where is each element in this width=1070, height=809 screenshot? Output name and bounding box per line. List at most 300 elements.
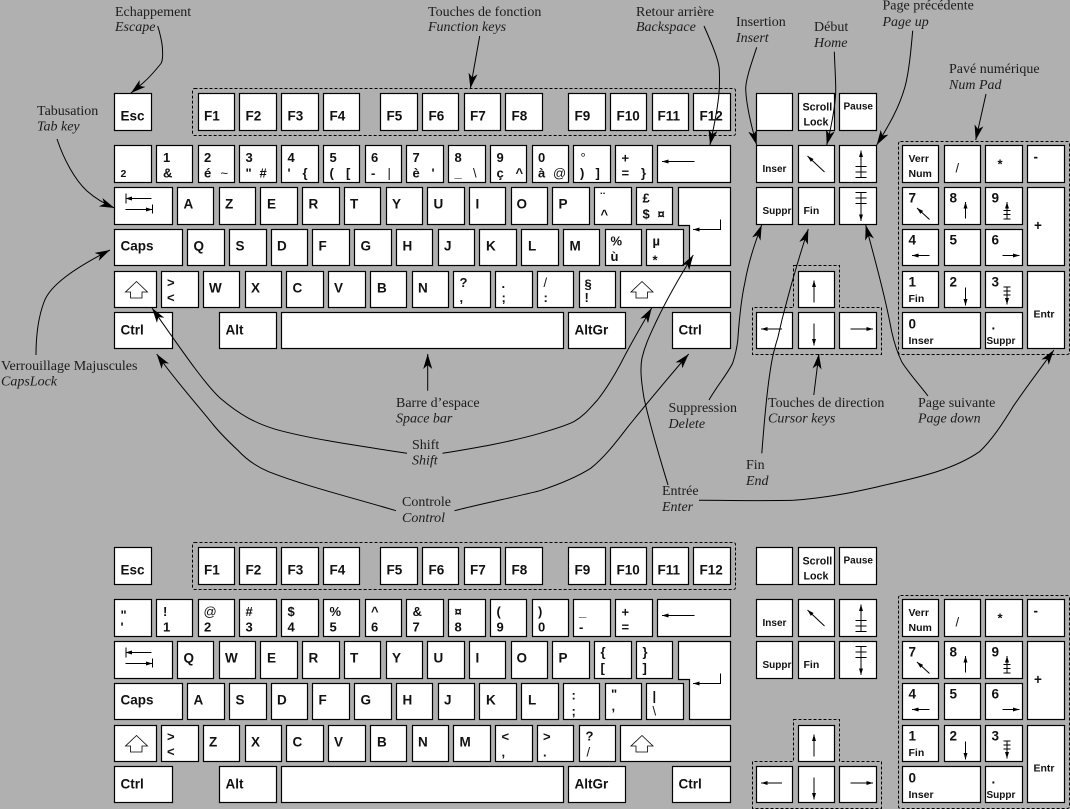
key: : ;: :: [572, 688, 576, 702]
key: F7: F7: [470, 562, 486, 578]
key: Y: Y: [392, 196, 401, 212]
key: . Suppr: [986, 312, 1022, 348]
key: Scroll Lock: [798, 548, 834, 584]
label: Page down: [917, 396, 995, 426]
key: S: S: [236, 692, 245, 708]
key: AltGr: AltGr: [574, 322, 609, 338]
key: F11: F11: [658, 562, 681, 578]
key: 6: 6: [992, 686, 1000, 702]
key: ) 0: 0: [538, 620, 545, 634]
block: numeric keypad: [902, 600, 1064, 802]
key: AltGr: [568, 766, 626, 802]
key: 5: [944, 684, 980, 720]
key: % 5: [324, 600, 360, 636]
key: F9: [568, 548, 606, 584]
key: P: [552, 642, 590, 678]
key: Backspace: [658, 600, 730, 636]
label: Num Pad: Pavé numérique: [949, 62, 1040, 77]
key: 1 &: 1: [163, 150, 170, 165]
key: " ': ": [120, 608, 127, 622]
key: J: [438, 684, 474, 720]
key: F8: [506, 94, 542, 130]
key: right Ctrl: [672, 312, 730, 348]
key: A: A: [184, 196, 194, 212]
key: $ 4: 4: [288, 620, 296, 634]
key: *: [986, 600, 1022, 636]
key: $ 4: [282, 600, 318, 636]
key: P: P: [558, 196, 568, 212]
arrow: Escape: [131, 26, 163, 93]
label: Page up: [882, 0, 974, 30]
key: W: [204, 272, 240, 308]
key: Scroll Lock: Scroll: [802, 556, 832, 568]
key: M: M: [460, 734, 471, 750]
label: CapsLock: [1, 359, 137, 390]
key: Q: [188, 230, 224, 266]
key: J: J: [444, 692, 452, 708]
key: *: *: [998, 156, 1004, 172]
key: 1 &: [156, 146, 192, 182]
key: < ,: [496, 726, 532, 762]
key: 0 Inser: Inser: [908, 789, 934, 801]
key: U: U: [434, 650, 443, 666]
key: -: [1028, 146, 1064, 182]
key: > <: <: [167, 290, 175, 305]
label: Control: [402, 495, 451, 526]
key: 2: 2: [950, 728, 957, 744]
key: Caps: [114, 230, 182, 266]
key: F7: [464, 548, 500, 584]
key: F10: [610, 548, 646, 584]
key: N: N: [418, 280, 428, 296]
key: 8: [944, 188, 980, 224]
key: 8 _ \: \: [473, 166, 477, 180]
key: Page up: [840, 146, 876, 182]
key: 5: [944, 230, 980, 266]
key: F12: F12: [700, 562, 723, 578]
key: > .: >: [543, 729, 551, 744]
key: H: H: [402, 692, 412, 708]
block: navigation keys: [756, 94, 876, 224]
key: left Ctrl: [114, 312, 172, 348]
key: ) 0: [532, 600, 568, 636]
key: ( 9: [490, 600, 526, 636]
key: E: [260, 642, 298, 678]
key: K: K: [486, 238, 496, 254]
key: ? /: [580, 726, 616, 762]
key: ) 0: ): [538, 604, 542, 619]
key: L: [522, 230, 558, 266]
key: H: [396, 230, 432, 266]
key: F3: [282, 548, 318, 584]
key: M: [564, 230, 600, 266]
key: F4: F4: [330, 562, 346, 578]
key: Alt: [220, 766, 276, 802]
arrow: Insert: [746, 47, 757, 145]
key: ! 1: 1: [163, 620, 170, 634]
key: Y: [386, 188, 422, 224]
key: 8 _ \: 8: [454, 150, 462, 165]
key: +: [1028, 188, 1064, 266]
row: QWERTY letters: [114, 642, 730, 720]
key: £ $ ¤: [636, 188, 672, 224]
key: 9 ç ^: 9: [496, 150, 504, 165]
key: 9 ç ^: ç: [496, 166, 504, 180]
key: ^ 6: [366, 600, 402, 636]
key: G: G: [360, 238, 371, 254]
key: 2 superscript: [114, 146, 152, 182]
key: ¨ ^: ^: [600, 207, 608, 222]
key: + =: [616, 600, 652, 636]
key: M: [454, 726, 490, 762]
key: 3: 3: [992, 274, 1000, 290]
key: 8 _ \: [448, 146, 486, 182]
block: navigation keys: [756, 548, 876, 678]
key: 4 ' {: ': [288, 166, 291, 180]
row: AZERTY letters: [114, 188, 730, 266]
key: } ]: [636, 642, 672, 678]
key: F10: F10: [616, 562, 640, 578]
key: F6: [422, 548, 458, 584]
key: F2: [240, 94, 276, 130]
label: Enter: [661, 484, 699, 515]
key: 1 Fin: Fin: [908, 747, 924, 759]
key: + =: =: [622, 620, 630, 634]
key: F: F: [318, 692, 327, 708]
key: µ *: *: [652, 252, 658, 268]
key: Fin: Fin: [804, 205, 819, 217]
key: 7 è ': ': [432, 166, 435, 180]
key: 5 ( [: 5: [330, 150, 337, 165]
key: 9: [986, 188, 1022, 224]
key: 9: [986, 642, 1022, 678]
key: . ;: .: [502, 276, 505, 291]
key: down arrow: [798, 312, 834, 348]
key: 3 " #: #: [260, 166, 268, 180]
dashed frame: cursor keys: [752, 266, 882, 354]
label: Insert: Insertion: [736, 15, 786, 30]
key: 1 &: &: [163, 166, 172, 180]
key: { [: [594, 642, 632, 678]
key: F12: F12: [700, 108, 723, 124]
key: M: M: [570, 238, 581, 254]
key: left Shift: [114, 726, 156, 762]
key: F6: F6: [428, 562, 445, 578]
key: & 7: [406, 600, 444, 636]
label: Tab key: Tabusation: [37, 104, 98, 119]
key: 1 Fin: 1: [908, 274, 916, 290]
key: > <: [162, 272, 198, 308]
key: blank: [756, 94, 792, 130]
key: 7 è ': 7: [412, 150, 420, 165]
callout labels: [1, 0, 1040, 526]
key: H: [396, 684, 432, 720]
key: +: +: [1034, 218, 1042, 233]
key: § !: !: [584, 290, 589, 305]
key: # 3: 3: [246, 620, 253, 634]
key: T: T: [350, 196, 359, 212]
key: ? ,: [454, 272, 490, 308]
label: Home: [813, 20, 848, 51]
key: ¤ 8: 8: [454, 620, 462, 634]
key: F2: F2: [246, 108, 261, 124]
key: Verr Num: Num: [908, 622, 932, 634]
key: £ $ ¤: $: [642, 206, 650, 222]
key: 2: [944, 726, 980, 762]
label: Page up: Page up: [882, 15, 929, 30]
key: } ]: }: [642, 644, 648, 660]
label: Home: Home: [813, 36, 847, 51]
key: F8: [506, 548, 542, 584]
key: R: R: [308, 196, 318, 212]
key: V: V: [334, 280, 343, 296]
arrow: Shift right: [442, 308, 652, 453]
key: F: [312, 684, 350, 720]
key: /: /: [956, 614, 960, 630]
key: Enter: [678, 188, 730, 266]
key: O: O: [516, 196, 527, 212]
key: 2: 2: [950, 274, 957, 290]
key: F6: F6: [428, 108, 445, 124]
key: Q: Q: [184, 650, 194, 666]
key: 4: 4: [908, 686, 916, 702]
key: F1: [198, 94, 234, 130]
label: Function keys: [427, 5, 541, 35]
key: Inser: Inser: [762, 618, 787, 629]
key: + = }: +: [622, 150, 630, 166]
key: Tab: [114, 642, 172, 678]
key: F9: F9: [574, 562, 590, 578]
key: left arrow: [756, 766, 792, 802]
key: F9: F9: [574, 108, 590, 124]
arrow: Page up: [877, 31, 913, 145]
key: F2: [240, 548, 276, 584]
key: . Suppr: [986, 766, 1022, 802]
key: /: [944, 146, 980, 182]
key: +: [1028, 642, 1064, 720]
key: 0 à @: 0: [538, 150, 545, 165]
label: Escape: Echappement: [115, 5, 191, 20]
key: I: I: [476, 196, 479, 212]
key: " ,: ": [611, 686, 617, 702]
key: 4: 4: [908, 232, 916, 248]
key: Verr Num: Verr: [908, 153, 929, 165]
key: F3: F3: [288, 562, 304, 578]
key: ¤ 8: ¤: [454, 604, 462, 619]
key: up arrow: [798, 272, 834, 308]
key: 4 ' {: [282, 146, 318, 182]
key: 3: [986, 726, 1022, 762]
key: F10: [610, 94, 646, 130]
key: X: [246, 726, 282, 762]
key: F: [312, 230, 350, 266]
key: > <: [162, 726, 198, 762]
key: Verr Num: Verr: [908, 607, 929, 619]
key: 8: 8: [950, 190, 958, 206]
key: C: C: [292, 280, 302, 296]
key: F9: [568, 94, 606, 130]
key: + = }: }: [641, 166, 646, 180]
key: > <: <: [167, 744, 175, 759]
key: Alt: [220, 312, 276, 348]
key: 4: [902, 684, 938, 720]
key: R: [302, 188, 340, 224]
key: Scroll Lock: Lock: [804, 570, 829, 582]
key: Page down: [840, 642, 876, 678]
label: CapsLock: Verrouillage Majuscules: [1, 359, 137, 374]
key: E: E: [267, 650, 276, 666]
key: Y: Y: [392, 650, 401, 666]
dashed frame: numeric keypad: [898, 142, 1070, 354]
key: Space bar: [282, 312, 564, 348]
key: ¨ ^: ¨: [600, 190, 606, 204]
key: ? /: ?: [586, 728, 594, 744]
key: R: [302, 642, 340, 678]
key: & 7: 7: [412, 620, 420, 634]
key: ( 9: 9: [496, 620, 504, 634]
key: £ $ ¤: £: [642, 190, 650, 206]
key: left Shift: [114, 272, 156, 308]
key: C: [286, 272, 324, 308]
key: T: T: [350, 650, 359, 666]
row: ZXCV letters: [114, 726, 730, 762]
label: Space bar: [396, 396, 480, 426]
label: Page down: Page down: [917, 412, 981, 426]
dashed frame: function keys: [192, 88, 736, 136]
key: Z: Z: [209, 734, 217, 750]
key: S: [230, 230, 266, 266]
key: ? ,: ,: [460, 290, 463, 305]
key: Caps: Caps: [120, 238, 154, 254]
key: B: B: [377, 280, 387, 296]
key: F7: [464, 94, 500, 130]
key: F2: F2: [246, 562, 261, 578]
arrow: Function keys: [470, 36, 480, 88]
label: Insert: [735, 15, 786, 46]
key: 3: 3: [992, 728, 1000, 744]
key: Alt: Alt: [226, 776, 244, 792]
arrow: Space bar: [427, 354, 429, 391]
key: 2: [944, 272, 980, 308]
dashed frame: cursor keys: [752, 720, 882, 808]
key: W: W: [209, 280, 222, 296]
key: Suppr: Suppr: [762, 660, 791, 671]
label: Backspace: Backspace: [636, 20, 696, 35]
label: Space bar: Barre d’espace: [396, 396, 480, 411]
key: B: [370, 726, 406, 762]
key: F3: F3: [288, 108, 304, 124]
key: + = }: =: [622, 166, 630, 180]
key: 6 - |: 6: [371, 150, 378, 165]
key: W: [220, 642, 256, 678]
key: B: [370, 272, 406, 308]
key: 6 - |: |: [388, 166, 391, 180]
key: Pause: Pause: [844, 102, 873, 112]
key: left Ctrl: [114, 766, 172, 802]
key: N: [412, 272, 448, 308]
key: ° ) ]: [574, 146, 610, 182]
key: O: [512, 642, 548, 678]
key: 9 ç ^: ^: [516, 166, 524, 180]
key: blank: [756, 548, 792, 584]
key: -: [1028, 600, 1064, 636]
key: % ù: [606, 230, 642, 266]
key: ! 1: [156, 600, 192, 636]
key: Backspace: [658, 146, 730, 182]
key: . ;: ;: [502, 290, 506, 305]
key: AltGr: AltGr: [574, 776, 609, 792]
row: function keys: [114, 548, 730, 584]
key: Space bar: [282, 766, 564, 802]
key: S: [230, 684, 266, 720]
key: 7: [902, 642, 938, 678]
key: 9 ç ^: [490, 146, 526, 182]
key: Entr: [1028, 272, 1064, 348]
key: ° ) ]: ]: [596, 166, 600, 180]
key: @ 2: 2: [204, 620, 211, 634]
key: 0 Inser: 0: [908, 770, 916, 786]
key: 6 - |: -: [371, 166, 375, 180]
arrow: Shift left: [152, 308, 407, 453]
key: Q: [178, 642, 214, 678]
label: Escape: [114, 5, 191, 35]
key: F4: [324, 548, 360, 584]
key: µ *: [646, 230, 684, 268]
key: F12: [694, 548, 730, 584]
key: L: [522, 684, 558, 720]
key: K: [480, 230, 516, 266]
label: Enter: Entrée: [662, 484, 699, 499]
key: | \: \: [652, 704, 656, 718]
key: /: [944, 600, 980, 636]
arrow: Tab key: [57, 139, 114, 208]
label: End: End: [745, 474, 770, 489]
key: 2 superscript: 2: [120, 168, 126, 180]
key: N: N: [418, 734, 428, 750]
keyboard: French AZERTY layout: [114, 88, 1070, 354]
key: 2 é ~: [198, 146, 234, 182]
arrow: Enter to main key: [641, 255, 693, 485]
key: Q: Q: [194, 238, 204, 254]
key: ¨ ^: [594, 188, 632, 224]
callout arrows: [36, 26, 1054, 511]
key: W: W: [225, 650, 238, 666]
key: S: S: [236, 238, 245, 254]
row: bottom modifiers: [114, 312, 730, 348]
label: Insert: Insert: [735, 31, 770, 46]
label: Function keys: Touches de fonction: [428, 5, 541, 20]
key: 5: 5: [950, 232, 958, 248]
key: § !: §: [584, 276, 592, 292]
key: 3 " #: 3: [246, 150, 253, 165]
key: left Ctrl: Ctrl: [120, 322, 144, 338]
key: right arrow: [840, 312, 876, 348]
key: D: [272, 230, 308, 266]
dashed frame: numeric keypad: [898, 596, 1070, 808]
key: Verr Num: [902, 146, 938, 182]
key: 2 é ~: 2: [204, 150, 211, 165]
key: 9: 9: [992, 644, 999, 660]
key: 0 Inser: [902, 312, 980, 348]
key: up arrow: [798, 726, 834, 762]
key: 7: 7: [908, 644, 916, 660]
key: L: L: [528, 692, 536, 708]
label: CapsLock: CapsLock: [1, 374, 58, 390]
key: Entr: Entr: [1034, 308, 1054, 320]
key: F6: [422, 94, 458, 130]
key: < ,: ,: [502, 744, 505, 760]
key: J: J: [444, 238, 452, 254]
